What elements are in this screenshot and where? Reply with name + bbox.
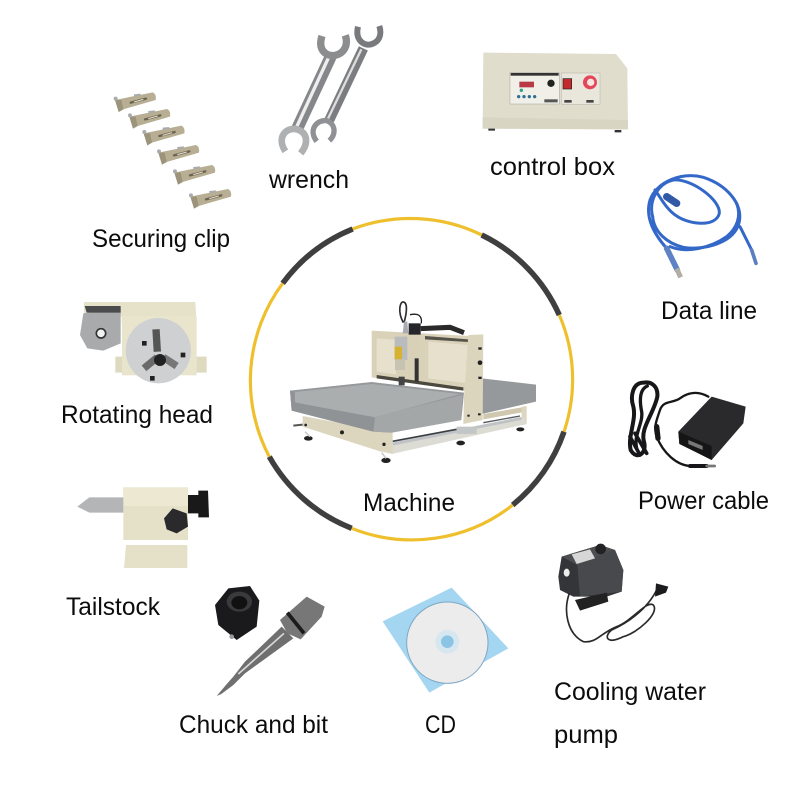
chuck jaws xyxy=(144,329,177,368)
box body xyxy=(483,53,628,129)
collet nut xyxy=(215,586,259,640)
ring segment: upper right dark xyxy=(482,235,559,315)
clip 3 xyxy=(142,126,185,145)
ferrite bead xyxy=(667,197,677,203)
clip 1 xyxy=(114,92,156,112)
clip 2 xyxy=(128,109,170,129)
gantry back plate xyxy=(372,331,470,392)
ring segment: right yellow xyxy=(559,315,573,432)
rear handle xyxy=(188,491,209,517)
star knob xyxy=(164,508,188,533)
pump body xyxy=(558,545,623,597)
pump label xyxy=(572,549,595,564)
gantry front plate xyxy=(457,334,483,434)
ring segment: left yellow xyxy=(250,283,283,457)
head back block xyxy=(84,302,197,323)
bit highlight xyxy=(238,633,284,674)
clip 5 xyxy=(173,165,215,185)
clip 4 xyxy=(157,145,199,165)
adapter brick xyxy=(678,397,746,460)
control box illustration xyxy=(483,53,628,132)
main table xyxy=(290,382,464,433)
chuck and bit illustration xyxy=(215,586,325,696)
USB data line illustration xyxy=(649,176,756,277)
pump top xyxy=(562,545,615,565)
disc hub ring xyxy=(435,630,459,654)
spindle and carriage xyxy=(395,302,464,385)
USB A plug xyxy=(667,248,677,270)
base frame and rails xyxy=(293,406,527,463)
chuck centre xyxy=(154,354,166,366)
label: wrench: wrench xyxy=(268,166,349,194)
right switch panel xyxy=(561,73,600,104)
collet xyxy=(280,597,325,639)
pump feet xyxy=(575,593,608,611)
ring segment: upper left dark xyxy=(283,229,353,283)
ring segment: lower right dark xyxy=(513,432,564,505)
left display panel xyxy=(510,73,559,104)
mini USB plug xyxy=(752,250,756,263)
CD sleeve xyxy=(383,588,508,693)
adapter front face xyxy=(678,432,712,460)
securing clips illustration xyxy=(114,92,231,209)
feet xyxy=(488,129,621,132)
power adapter illustration xyxy=(630,382,746,466)
label: power cable: Power cable xyxy=(638,487,769,515)
collet band xyxy=(287,613,304,633)
box lower shading xyxy=(483,117,628,129)
cables xyxy=(630,382,715,466)
stepper motor xyxy=(80,306,121,351)
label: chuck and bit: Chuck and bit xyxy=(179,711,328,739)
centre point xyxy=(77,497,123,513)
tailstock base xyxy=(124,545,187,568)
pump front face xyxy=(577,550,623,597)
side port xyxy=(564,569,570,577)
CD illustration xyxy=(383,588,508,693)
bit shank xyxy=(217,627,293,696)
label: control box: control box xyxy=(490,153,616,181)
label: data line: Data line xyxy=(661,297,757,325)
label: CD: CD xyxy=(425,711,456,739)
ring segment: bottom yellow xyxy=(352,505,513,540)
label: securing clip: Securing clip xyxy=(92,225,230,253)
wrench 2 xyxy=(313,26,380,141)
tailstock body xyxy=(123,487,188,540)
wrenches illustration xyxy=(282,26,380,153)
label: rotating head: Rotating head xyxy=(61,401,213,429)
ring segment: top yellow xyxy=(353,218,482,235)
tailstock body highlight xyxy=(123,487,188,506)
tailstock illustration xyxy=(77,487,209,568)
disc centre xyxy=(441,635,454,648)
pump power cord xyxy=(567,590,657,642)
disc xyxy=(407,602,488,683)
rotating head illustration xyxy=(80,302,207,383)
head front plate xyxy=(122,316,197,375)
pump plug xyxy=(655,583,668,597)
adapter socket xyxy=(688,440,703,450)
head feet xyxy=(115,357,207,373)
chuck disc xyxy=(126,318,191,383)
label: pump: pump xyxy=(554,721,618,749)
chuck bolts xyxy=(142,341,185,381)
label: tailstock: Tailstock xyxy=(66,593,160,621)
ring around machine xyxy=(250,218,573,540)
cooling water pump illustration xyxy=(558,544,668,642)
label: machine: Machine xyxy=(363,489,455,517)
cable loops xyxy=(649,176,752,250)
ring segment: lower left dark xyxy=(269,457,352,528)
wrench 1 xyxy=(282,35,346,153)
label: cooling water: Cooling water xyxy=(554,678,706,706)
USB A metal tip xyxy=(677,269,681,277)
outlet xyxy=(595,544,606,554)
machine illustration xyxy=(290,302,536,463)
rear table section xyxy=(482,378,536,414)
clip 6 xyxy=(189,189,231,209)
